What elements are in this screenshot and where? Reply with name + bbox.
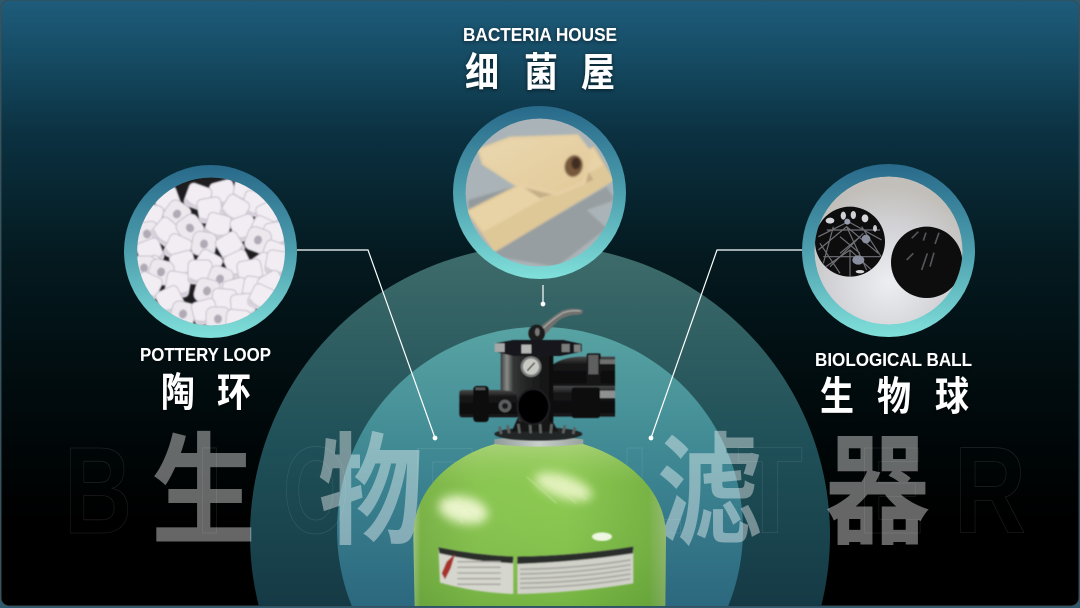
heading: biological ball — [815, 350, 972, 419]
heading: biological ball: 生 — [820, 375, 854, 419]
pottery rings photo — [137, 178, 285, 326]
pressure gauge — [521, 356, 541, 377]
heading: pottery loop: 陶 — [161, 371, 195, 415]
outline english watermark: BIOFILTER: E — [858, 423, 924, 560]
outline english watermark: BIOFILTER: B — [64, 423, 132, 560]
ball two — [891, 227, 962, 298]
heading: bacteria house: 屋 — [581, 51, 615, 95]
right upper pipe — [548, 357, 615, 387]
connector: bacteria house — [541, 285, 545, 306]
heading: biological ball: 物 — [877, 375, 911, 419]
inner glow circle — [337, 327, 743, 606]
heading: pottery loop — [140, 345, 271, 415]
photo circle: bacteria house — [453, 106, 626, 279]
ball one — [815, 207, 885, 277]
tank neck ring — [494, 437, 583, 447]
connector: pottery loop — [297, 250, 437, 440]
tank body — [413, 437, 666, 606]
large title: 生物滤器 — [151, 424, 930, 560]
outer glow circle — [250, 245, 830, 606]
left pipe — [459, 390, 519, 417]
top cap — [495, 340, 582, 356]
heading: bacteria house: 细 — [465, 51, 499, 95]
large title: 生物滤器: 滤 — [657, 424, 762, 560]
large title: 生物滤器: 生 — [151, 424, 256, 560]
photo circle: biological ball — [802, 164, 975, 337]
outline english watermark: BIOFILTER — [64, 423, 1026, 560]
photo circle: pottery loop — [124, 165, 297, 338]
heading: biological ball: 球 — [935, 375, 969, 419]
filter tank — [413, 308, 666, 606]
heading: pottery loop: POTTERY LOOP — [140, 345, 271, 365]
large title: 生物滤器: 物 — [318, 424, 423, 560]
flange and bolts — [494, 427, 582, 441]
large title: 生物滤器: 器 — [825, 424, 930, 560]
bacteria house photo — [466, 118, 615, 267]
heading: bacteria house: 菌 — [524, 51, 558, 95]
outline english watermark: BIOFILTER: I — [522, 423, 549, 560]
tank label left — [438, 547, 513, 594]
connector: biological ball — [649, 250, 802, 440]
heading: bacteria house: BACTERIA HOUSE — [463, 25, 617, 45]
outline english watermark: BIOFILTER: I — [196, 423, 223, 560]
biological balls photo — [814, 176, 962, 324]
valve main body — [501, 353, 553, 422]
outline english watermark: BIOFILTER: T — [737, 423, 803, 560]
tank label right — [517, 547, 633, 594]
right lower pipe — [548, 386, 615, 417]
heading: pottery loop: 环 — [217, 371, 251, 415]
outline english watermark: BIOFILTER: R — [954, 423, 1026, 560]
multiport valve — [459, 308, 615, 441]
heading: bacteria house — [463, 25, 617, 95]
outline english watermark: BIOFILTER: F — [410, 423, 476, 560]
handle — [537, 308, 583, 335]
center port — [517, 389, 549, 424]
outline english watermark: BIOFILTER: O — [283, 423, 349, 560]
heading: biological ball: BIOLOGICAL BALL — [815, 350, 972, 370]
outline english watermark: BIOFILTER: L — [620, 423, 684, 560]
